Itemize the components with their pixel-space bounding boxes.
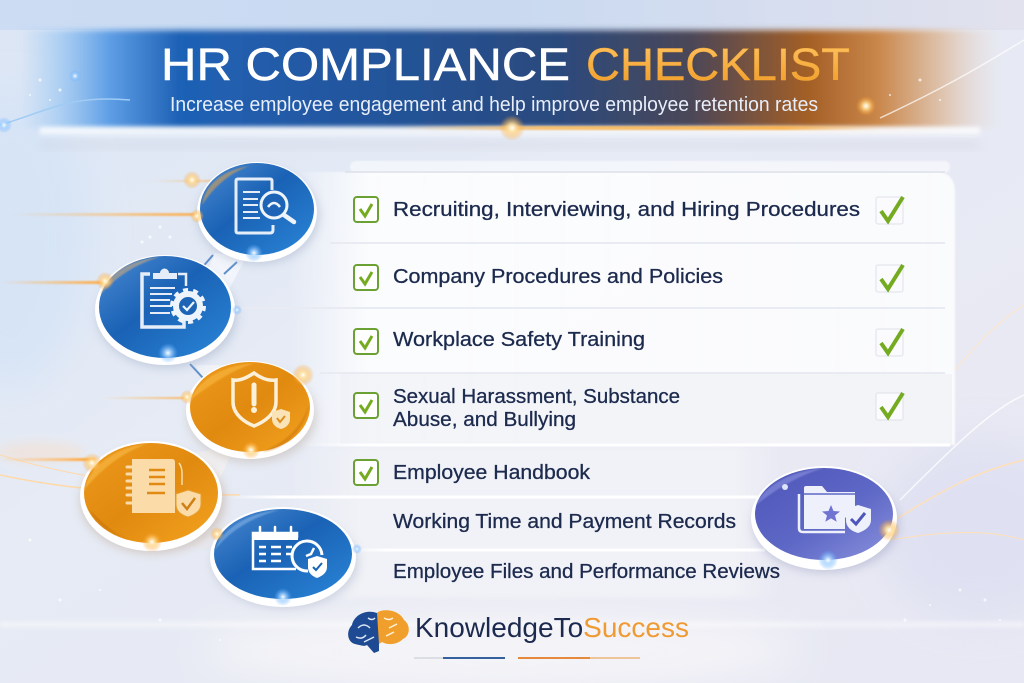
wordmark: KnowledgeToSuccess: [415, 612, 689, 643]
coin 6: folder with star: [751, 466, 900, 572]
item 1: Recruiting, Interviewing, and Hiring Procedures: [393, 198, 860, 221]
checklist panel: [225, 161, 955, 598]
heading: HR COMPLIANCE: [161, 39, 570, 90]
logo: KnowledgeToSuccess: [348, 610, 689, 658]
item 2: Company Procedures and Policies: [393, 265, 723, 288]
coin 3: safety shield: [180, 361, 316, 462]
item 5: Employee Handbook: [393, 461, 591, 484]
icon: clipboard with gear: [142, 268, 204, 327]
icon: notebook with shield: [127, 459, 201, 517]
connector links: [178, 253, 265, 555]
item 4: [354, 385, 903, 431]
coin 4: handbook: [80, 441, 225, 553]
icon: folder with shield: [799, 486, 871, 533]
heading: CHECKLIST: [586, 39, 850, 90]
subtitle: Increase employee engagement and help improve employee retention rates: [170, 94, 818, 116]
sparkle dots: [28, 78, 1001, 641]
icon: document with magnifier: [236, 179, 294, 233]
item 3: Workplace Safety Training: [393, 328, 645, 351]
icon: brain: [348, 610, 409, 653]
icon: shield with alert and badge: [233, 373, 290, 429]
item 1: [354, 197, 903, 224]
item 3: [354, 328, 903, 356]
item 2: [354, 265, 903, 292]
heading: [161, 39, 850, 90]
glow streaks: [0, 180, 250, 462]
item 4: Abuse, and Bullying: [393, 408, 576, 431]
coin 1: recruiting: [183, 162, 319, 264]
item 4: Sexual Harassment, Substance: [393, 385, 680, 408]
item 6: Working Time and Payment Records: [393, 510, 736, 533]
coin 5: calendar and clock: [210, 507, 362, 608]
coin 2: clipboard and gear: [95, 255, 242, 368]
title banner: [0, 30, 1024, 148]
item 7: Employee Files and Performance Reviews: [393, 560, 780, 583]
icon: calendar, clock, shield: [253, 527, 327, 578]
